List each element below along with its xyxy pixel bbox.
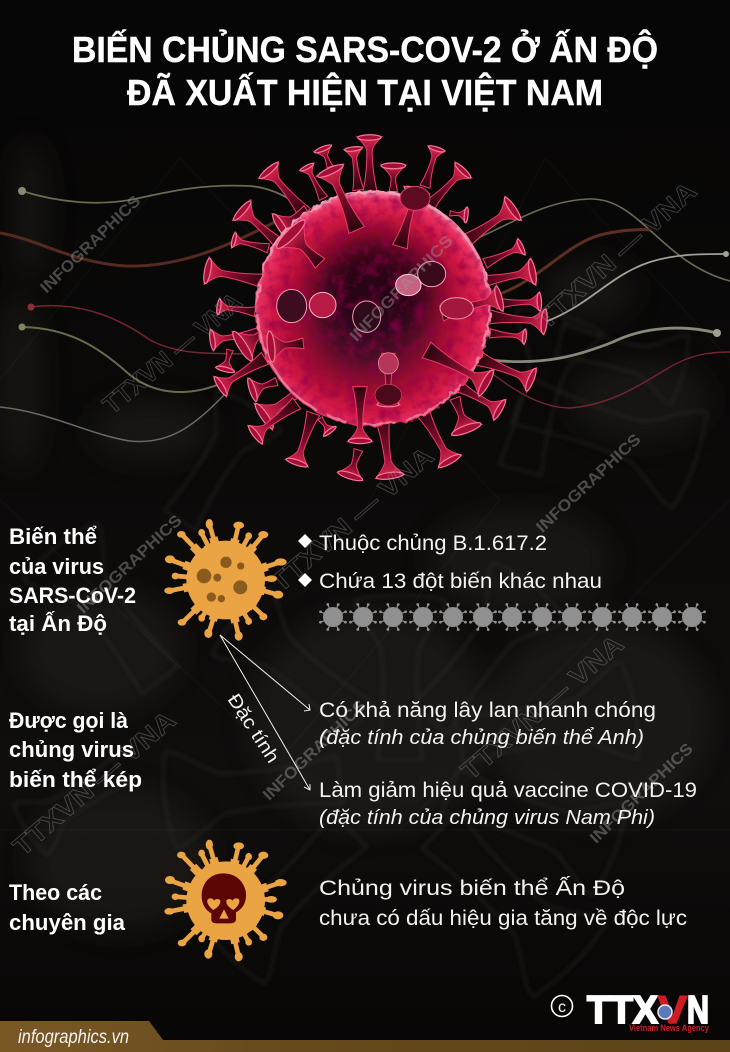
virus illustration: red coronavirus	[202, 135, 548, 483]
title: BIẾN CHỦNG SARS-COV-2 Ở ẤN ĐỘ	[72, 28, 658, 70]
left label: variant in India	[9, 524, 136, 636]
left label: variant in India: SARS-CoV-2	[9, 583, 136, 608]
left label: variant in India: Biến thể	[9, 524, 97, 549]
left label: according to experts: chuyên gia	[9, 910, 126, 935]
left label: according to experts: Theo các	[9, 880, 102, 905]
text: characteristics: (đặc tính của chủng biến thể Anh)	[319, 726, 644, 749]
footer bar	[0, 1021, 730, 1052]
icon: orange virus with skull	[164, 840, 287, 961]
logo: TTXVN	[587, 989, 709, 1033]
outer spikes	[202, 135, 548, 483]
text: expert conclusion: Chủng virus biến thể Ấn Độ	[319, 877, 625, 900]
watermarks: TTXVN — VNA	[265, 440, 439, 598]
logo: TTXVN: V	[658, 989, 687, 1032]
watermarks: INFOGRAPHICS	[347, 232, 457, 345]
left label: double mutant: Được gọi là	[9, 708, 129, 733]
left label: variant in India: tại Ấn Độ	[9, 611, 107, 636]
watermarks: INFOGRAPHICS	[533, 431, 645, 536]
watermarks: TTXVN — VNA	[7, 704, 181, 862]
logo: TTXVN: Vietnam News Agency	[629, 1023, 709, 1033]
watermarks	[7, 175, 702, 862]
watermarks: TTXVN — VNA	[530, 175, 702, 335]
left label: according to experts	[9, 880, 126, 935]
copyright symbol	[552, 996, 572, 1016]
icon row: 13 grey mini viruses	[314, 598, 711, 636]
smoky ghost virus background	[0, 140, 712, 1001]
flowing lines left	[0, 186, 310, 442]
title: ĐÃ XUẤT HIỆN TẠI VIỆT NAM	[127, 71, 603, 113]
surface spikes	[266, 162, 505, 444]
text: expert conclusion	[319, 877, 687, 930]
title	[72, 28, 658, 113]
rotated label: characteristics: Đặc tính	[223, 690, 283, 767]
text: characteristics: (đặc tính của chủng virus Nam Phi)	[319, 806, 655, 829]
watermarks: INFOGRAPHICS	[587, 740, 697, 847]
flowing lines right	[473, 199, 730, 408]
watermarks: TTXVN — VNA	[455, 628, 629, 786]
logo: TTXVN: N	[687, 989, 709, 1032]
watermarks: INFOGRAPHICS	[37, 193, 145, 297]
watermarks: INFOGRAPHICS	[260, 697, 370, 804]
copyright symbol: c	[558, 999, 566, 1016]
watermarks: TTXVN — VNA	[97, 286, 248, 420]
logo: TTXVN: TTX	[587, 989, 658, 1032]
text: characteristics: Làm giảm hiệu quả vaccine COVID-19	[319, 779, 697, 802]
left label: double mutant	[9, 708, 142, 792]
text: characteristics	[319, 699, 697, 829]
left label: variant in India: của virus	[9, 554, 104, 579]
footer bar: infographics.vn	[18, 1027, 129, 1048]
watermarks: INFOGRAPHICS	[74, 512, 186, 617]
diagonal watermark guide lines	[0, 158, 730, 830]
bullet list: lineage and mutations: Chứa 13 đột biến khác nhau	[319, 570, 602, 593]
bullet list: lineage and mutations	[298, 532, 602, 593]
text: expert conclusion: chưa có dấu hiệu gia tăng về độc lực	[319, 907, 687, 930]
sphere	[254, 190, 492, 428]
icon: orange virus with spots	[164, 519, 287, 641]
arrows from virus to characteristics	[220, 635, 310, 790]
left label: double mutant: biến thể kép	[9, 767, 142, 792]
left label: double mutant: chủng virus	[9, 737, 134, 762]
text: characteristics: Có khả năng lây lan nhanh chóng	[319, 699, 656, 722]
bullet list: lineage and mutations: Thuộc chủng B.1.617.2	[319, 532, 547, 555]
